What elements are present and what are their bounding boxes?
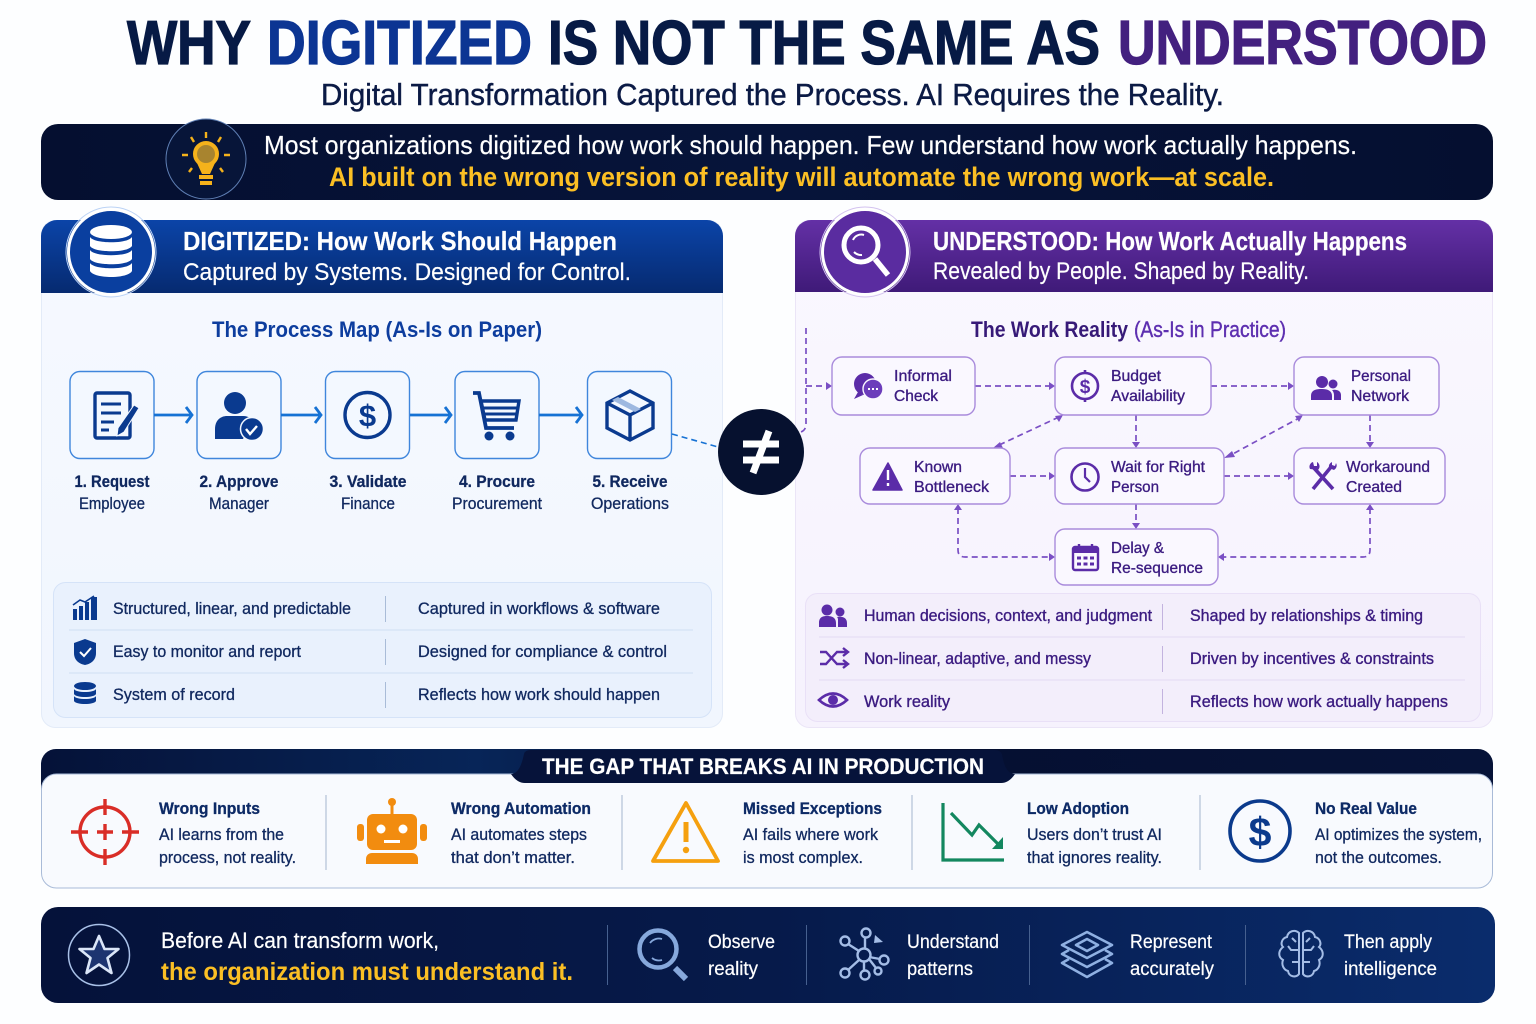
- item: missed exceptions: is most complex.: [743, 849, 863, 867]
- step: observe reality: Observe: [708, 932, 775, 953]
- step 5 receive: 5. Receive: [592, 472, 668, 491]
- node: budget availability: [1055, 357, 1211, 415]
- heading: work reality: [971, 317, 1286, 342]
- panel: understood: [795, 207, 1493, 728]
- banner line 1: Most organizations digitized how work should happen. Few understand how work actually happens.: [264, 130, 1357, 160]
- panel: the gap: [41, 749, 1493, 888]
- item: missed exceptions: Missed Exceptions: [743, 799, 882, 818]
- icon: people: [819, 604, 847, 627]
- step 3 validate: [326, 372, 410, 513]
- step: observe reality: [640, 930, 775, 980]
- digitized attributes table: Reflects how work should happen: [418, 686, 660, 704]
- step 1 request: [70, 372, 154, 513]
- icon: shuffle: [820, 648, 848, 668]
- icon: eye: [819, 694, 847, 706]
- dashed flow arrows: [801, 328, 1374, 561]
- step 3 validate: 3. Validate: [330, 472, 406, 491]
- node: budget availability: Budget: [1111, 368, 1162, 385]
- title: IS NOT THE SAME AS: [548, 9, 1100, 78]
- gap heading tab: THE GAP THAT BREAKS AI IN PRODUCTION: [542, 754, 984, 779]
- understood attributes table: Human decisions, context, and judgment: [864, 607, 1152, 625]
- node: informal check: Check: [894, 388, 939, 405]
- step 4 procure: 4. Procure: [459, 472, 535, 491]
- understood attributes table: Reflects how work actually happens: [1190, 693, 1448, 711]
- item: low adoption: Low Adoption: [1027, 799, 1129, 818]
- item: wrong automation: that don’t matter.: [451, 849, 575, 867]
- item: no real value: not the outcomes.: [1315, 849, 1442, 867]
- item: wrong automation: AI automates steps: [451, 826, 587, 844]
- digitized attributes table: [54, 582, 712, 718]
- digitized header: DIGITIZED: How Work Should Happen: [183, 226, 617, 256]
- item: wrong inputs: AI learns from the: [159, 826, 284, 844]
- item: wrong automation: Wrong Automation: [451, 799, 591, 818]
- node: known bottleneck: Known: [914, 459, 962, 476]
- item: wrong automation: [357, 798, 591, 867]
- icon: lightbulb: [166, 119, 246, 199]
- item: wrong inputs: [71, 799, 296, 867]
- step: represent accurately: [1062, 932, 1214, 980]
- icon: bar chart: [73, 596, 97, 620]
- digitized attributes table: Designed for compliance & control: [418, 643, 667, 661]
- step: observe reality: reality: [708, 959, 758, 980]
- node: wait for right person: Person: [1111, 479, 1159, 496]
- node: wait for right person: Wait for Right: [1111, 459, 1206, 476]
- step 1 request: 1. Request: [74, 472, 150, 491]
- heading: work reality: The Work Reality: [971, 317, 1129, 342]
- arrow: [154, 407, 192, 423]
- icon: database: [66, 207, 156, 297]
- step 2 approve: [197, 372, 281, 513]
- panel: digitized: [41, 207, 723, 728]
- digitized attributes table: Captured in workflows & software: [418, 600, 660, 618]
- node: budget availability: $: [1080, 377, 1091, 398]
- item: wrong inputs: process, not reality.: [159, 849, 296, 867]
- node: budget availability: Availability: [1111, 388, 1185, 405]
- banner line 2: AI built on the wrong version of reality will automate the wrong work—at scale.: [329, 162, 1274, 192]
- item: no real value: AI optimizes the system,: [1315, 826, 1482, 844]
- step: understand patterns: Understand: [907, 932, 999, 953]
- item: no real value: No Real Value: [1315, 799, 1417, 818]
- digitized attributes table: Structured, linear, and predictable: [113, 600, 351, 618]
- step: understand patterns: [840, 928, 999, 980]
- icon: database small: [74, 682, 96, 704]
- step 5 receive: Operations: [591, 495, 669, 513]
- digitized attributes table: System of record: [113, 686, 235, 704]
- node: delay and re-sequence: Re-sequence: [1111, 560, 1203, 577]
- icon: shield: [74, 639, 96, 665]
- arrow: [539, 407, 582, 423]
- subtitle: Digital Transformation Captured the Process. AI Requires the Reality.: [321, 77, 1224, 112]
- node: known bottleneck: Bottleneck: [914, 479, 990, 496]
- step 1 request: Employee: [79, 495, 145, 513]
- item: no real value: $: [1249, 809, 1272, 855]
- not-equal connector: [672, 409, 804, 495]
- understood attributes table: [806, 594, 1480, 722]
- title: DIGITIZED: [267, 9, 532, 78]
- title: [127, 9, 1487, 78]
- item: low adoption: that ignores reality.: [1027, 849, 1162, 867]
- node: informal check: [832, 357, 975, 415]
- icon: magnifier: [820, 207, 910, 297]
- arrow: [410, 407, 451, 423]
- item: no real value: [1230, 799, 1482, 867]
- title: WHY: [127, 9, 251, 78]
- digitized attributes table: Easy to monitor and report: [113, 643, 301, 661]
- step 4 procure: Procurement: [452, 495, 542, 513]
- step 3 validate: Finance: [341, 495, 395, 513]
- node: workaround created: Workaround: [1346, 459, 1430, 476]
- node: workaround created: Created: [1346, 479, 1402, 496]
- arrow: [281, 407, 321, 423]
- understood header: Revealed by People. Shaped by Reality.: [933, 258, 1309, 285]
- understood header: UNDERSTOOD: How Work Actually Happens: [933, 226, 1407, 256]
- node: personal network: Personal: [1351, 368, 1411, 385]
- heading: work reality: (As-Is in Practice): [1134, 317, 1286, 342]
- understood attributes table: Work reality: [864, 693, 951, 711]
- step: represent accurately: Represent: [1130, 932, 1213, 953]
- understood attributes table: Driven by incentives & constraints: [1190, 650, 1434, 668]
- step: apply intelligence: [1279, 931, 1437, 980]
- banner: key message: [41, 119, 1493, 200]
- item: missed exceptions: AI fails where work: [743, 826, 879, 844]
- node: delay and re-sequence: [1055, 529, 1218, 585]
- item: low adoption: [943, 799, 1162, 867]
- node: delay and re-sequence: Delay &: [1111, 540, 1164, 557]
- step: apply intelligence: Then apply: [1344, 932, 1432, 953]
- step: understand patterns: patterns: [907, 959, 973, 980]
- icon: star: [68, 924, 130, 986]
- node: personal network: Network: [1351, 388, 1410, 405]
- footer message: Before AI can transform work,: [161, 928, 439, 953]
- node: known bottleneck: [860, 448, 1010, 504]
- step 2 approve: Manager: [209, 495, 269, 513]
- step 5 receive: [588, 372, 672, 513]
- item: missed exceptions: [653, 799, 882, 867]
- understood attributes table: Non-linear, adaptive, and messy: [864, 650, 1092, 668]
- understood attributes table: Shaped by relationships & timing: [1190, 607, 1423, 625]
- understood header: [795, 220, 1493, 292]
- heading: process map: The Process Map (As-Is on Paper): [212, 317, 542, 342]
- footer message: the organization must understand it.: [161, 958, 573, 986]
- node: personal network: [1294, 357, 1439, 415]
- footer message: [161, 928, 573, 986]
- node: wait for right person: [1055, 448, 1224, 504]
- step: apply intelligence: intelligence: [1344, 959, 1437, 980]
- digitized header: [41, 220, 723, 293]
- step 2 approve: 2. Approve: [200, 472, 278, 491]
- step 4 procure: [452, 372, 542, 513]
- item: low adoption: Users don’t trust AI: [1027, 826, 1162, 844]
- digitized header: Captured by Systems. Designed for Control.: [183, 259, 631, 286]
- step 3 validate: $: [359, 398, 376, 433]
- panel: footer: [41, 907, 1495, 1003]
- node: informal check: Informal: [894, 368, 952, 385]
- item: wrong inputs: Wrong Inputs: [159, 799, 260, 818]
- step: represent accurately: accurately: [1130, 959, 1214, 980]
- node: workaround created: [1294, 448, 1445, 504]
